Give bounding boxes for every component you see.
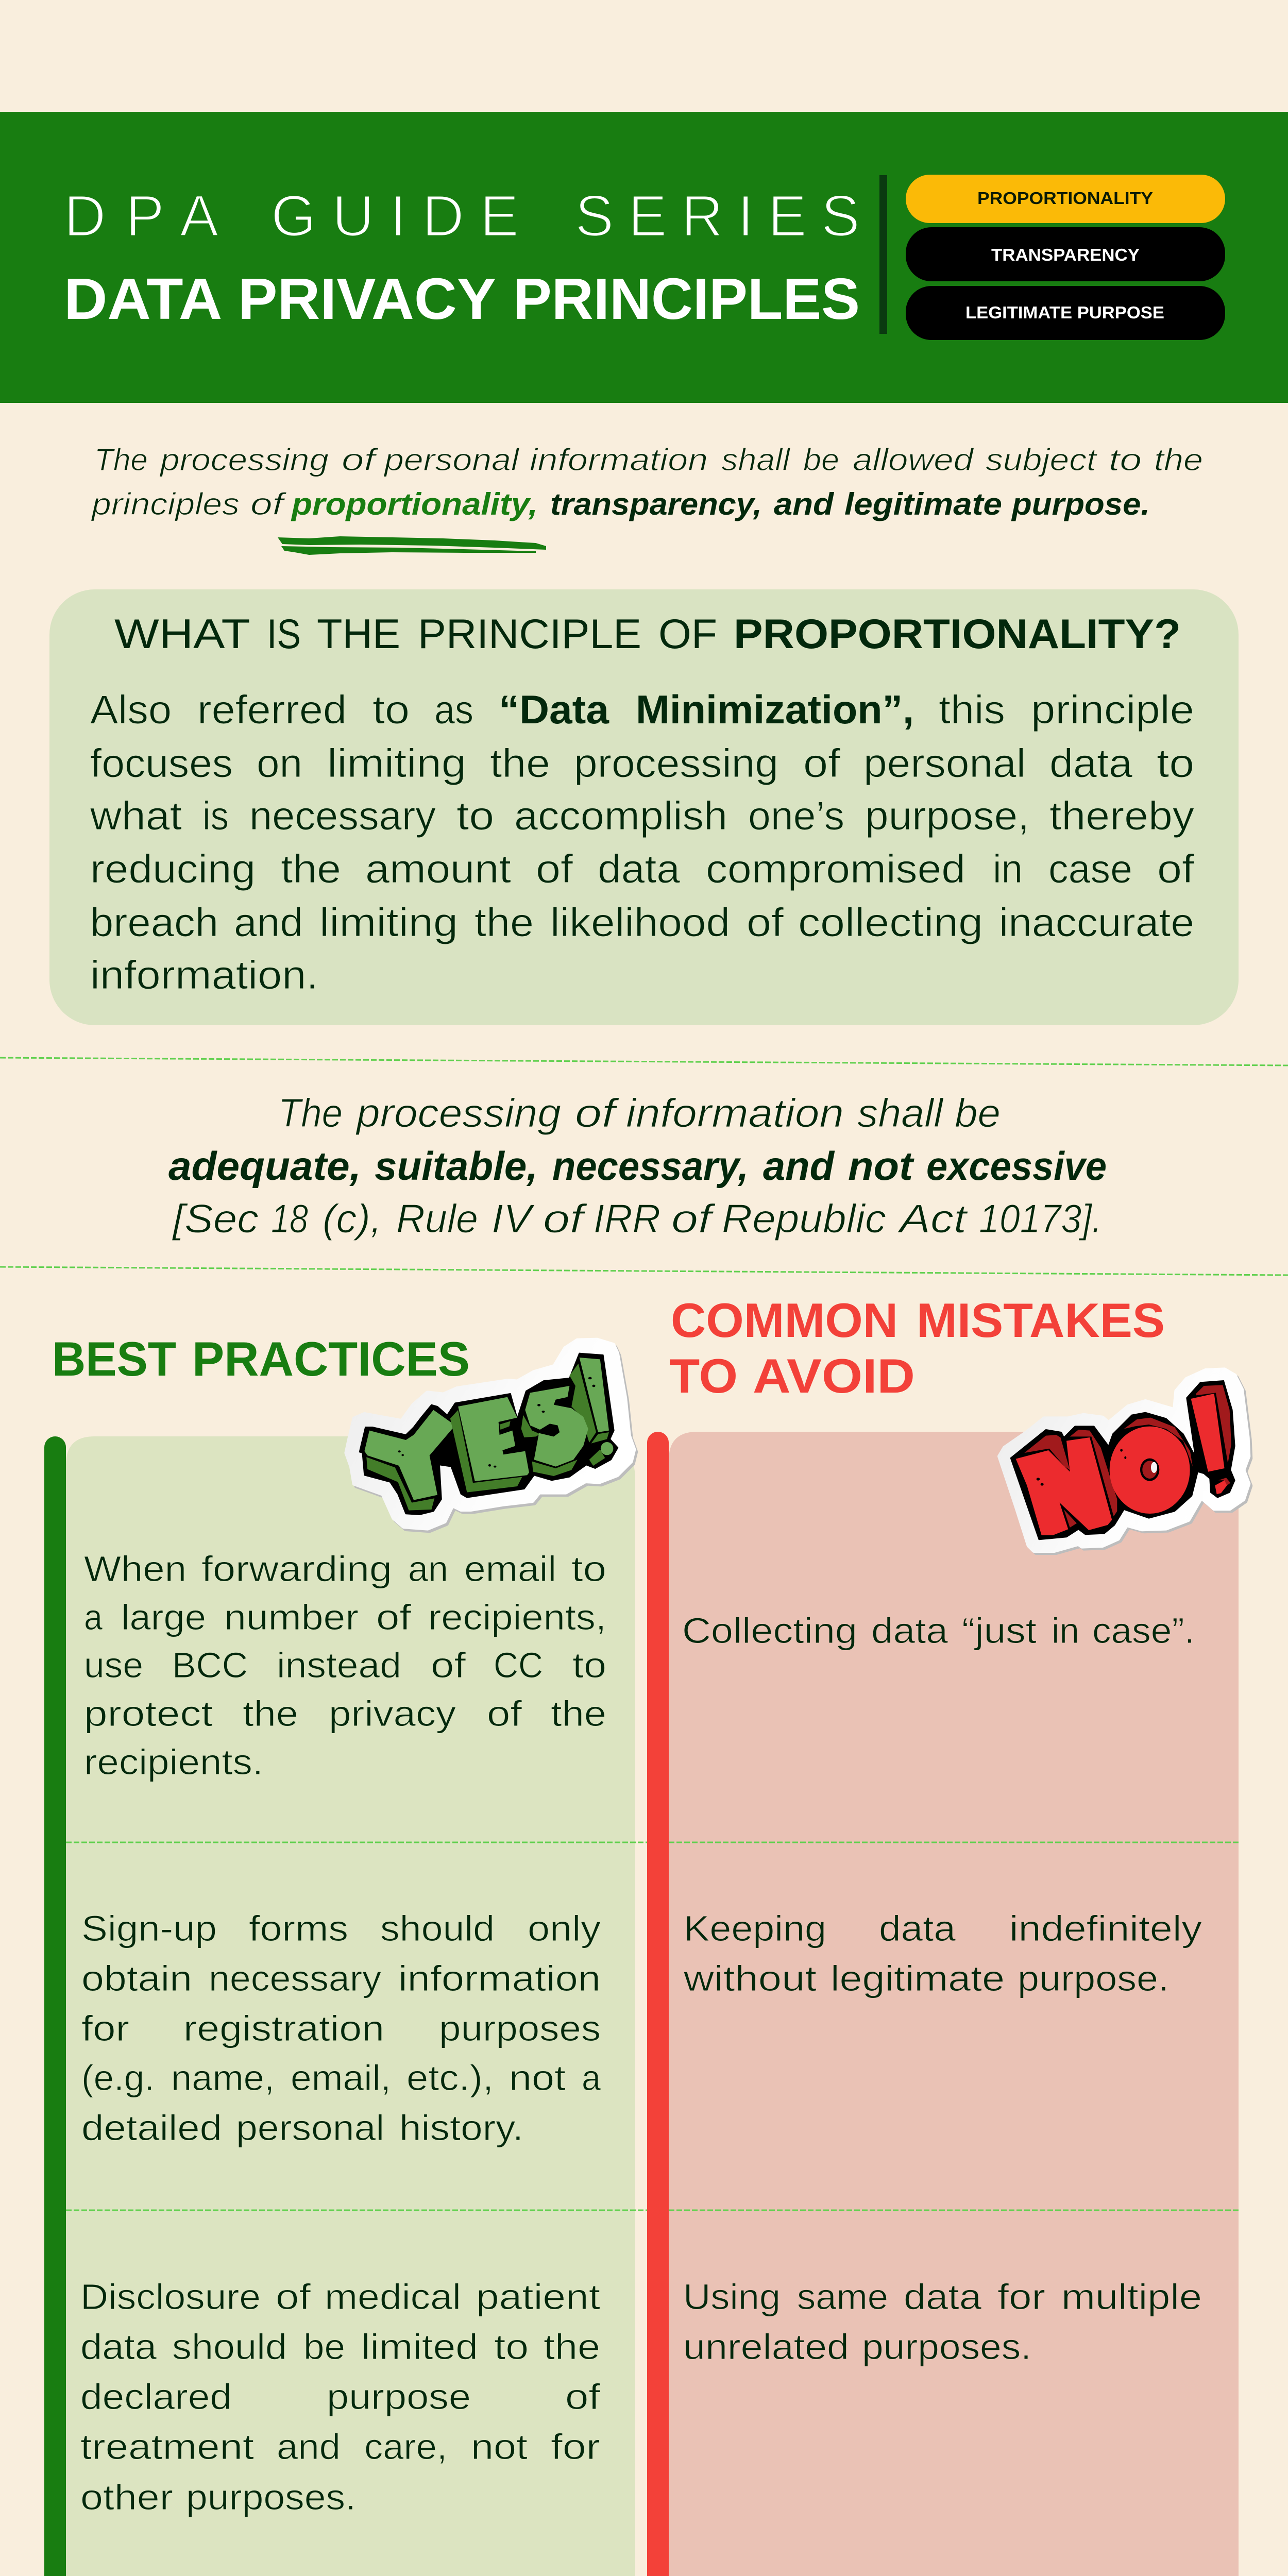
common mistake 2 (683, 1908, 1202, 1998)
panel body text: of (803, 740, 840, 786)
panel body text: in (993, 846, 1023, 891)
panel heading: PROPORTIONALITY? (734, 611, 1181, 657)
best practice 1: protect (84, 1693, 213, 1734)
brush underline (278, 536, 546, 555)
icon: NO sticker (999, 1369, 1250, 1553)
panel body text: on (257, 740, 302, 786)
legal statement: [Sec (172, 1196, 259, 1241)
legal statement: be (955, 1090, 1001, 1136)
legal statement: necessary, (552, 1143, 749, 1189)
legal statement: information (626, 1090, 844, 1136)
intro statement: information (530, 443, 708, 477)
pill: transparency: TRANSPARENCY (991, 245, 1140, 264)
best practice 2: a (582, 2058, 601, 2098)
best practice 3: of (565, 2377, 601, 2417)
panel: best practices column (44, 1436, 635, 2576)
best practice 3: data (80, 2327, 157, 2367)
panel body text: referred (197, 687, 347, 732)
best practice 3: of (276, 2277, 311, 2317)
panel: what is the principle of proportionality (49, 589, 1239, 1025)
legal statement: The (278, 1090, 343, 1136)
best practice 1: privacy (329, 1693, 456, 1734)
panel body text: the (281, 846, 341, 891)
intro statement: legitimate (844, 487, 1002, 521)
title: Data Privacy Principles: PRIVACY (238, 266, 496, 331)
best practice 1: instead (277, 1645, 401, 1685)
common mistake 1: data (871, 1611, 948, 1651)
intro statement: The (94, 443, 148, 477)
common mistake 2: Keeping (684, 1908, 826, 1948)
panel heading: THE (317, 611, 400, 657)
common mistake 3: multiple (1061, 2277, 1202, 2317)
panel body text: focuses (90, 740, 233, 786)
best practice 2: only (528, 1908, 601, 1948)
panel body text: amount (365, 846, 511, 891)
best practice 3: other (80, 2477, 173, 2517)
panel body text: one’s (748, 793, 844, 838)
intro statement: and (774, 487, 834, 521)
best practice 2 (81, 1908, 601, 2148)
panel body text: purpose, (865, 793, 1029, 838)
legal statement: excessive (926, 1143, 1107, 1189)
legal statement: of (543, 1196, 588, 1241)
panel body text: what (90, 793, 182, 838)
best practice 2: email, (291, 2058, 391, 2098)
legal statement: shall (857, 1090, 944, 1136)
panel body text: the (490, 740, 550, 786)
best practice 1: to (571, 1549, 606, 1589)
best practice 2: registration (183, 2008, 384, 2048)
panel body text: principle (1031, 687, 1194, 732)
panel body text (90, 687, 1194, 997)
common mistake 2: data (879, 1908, 956, 1948)
panel body text: information. (90, 952, 318, 997)
legal statement: IV (492, 1196, 535, 1241)
best practice 1: recipients, (428, 1597, 606, 1637)
panel body text: personal (863, 740, 1026, 786)
legal statement: Rule (396, 1196, 478, 1241)
best practice 2: history. (399, 2108, 523, 2148)
common mistake 3: data (904, 2277, 981, 2317)
best practice 3: the (544, 2327, 600, 2367)
panel body text: limiting (327, 740, 466, 786)
panel body text: to (456, 793, 494, 838)
best practice 2: detailed (81, 2108, 222, 2148)
header banner (0, 112, 1288, 403)
panel body text: to (1157, 740, 1194, 786)
best practice 2: purposes (439, 2008, 601, 2048)
heading: best practices: PRACTICES (192, 1332, 470, 1386)
best practice 2: forms (249, 1908, 348, 1948)
best practice 2: for (81, 2008, 129, 2048)
best practice 3: for (551, 2427, 600, 2467)
best practice 3: not (471, 2427, 528, 2467)
panel body text: “Data (499, 687, 609, 732)
panel heading: PRINCIPLE (418, 611, 641, 657)
best practice 1: of (431, 1645, 466, 1685)
header divider (879, 175, 887, 334)
best practice 3: should (172, 2327, 287, 2367)
legal statement: (c), (323, 1196, 382, 1241)
heading: common mistakes to avoid (669, 1293, 1165, 1403)
legal statement: not (848, 1143, 914, 1189)
best practice 1: When (84, 1549, 187, 1589)
intro statement: purpose. (1011, 487, 1150, 521)
title: Data Privacy Principles: PRINCIPLES (513, 266, 860, 331)
legal statement: suitable, (375, 1143, 538, 1189)
best practice 3: purpose (327, 2377, 471, 2417)
best practice 1: CC (494, 1645, 543, 1685)
common mistake 1: “just (962, 1611, 1037, 1651)
best practice 3: and (277, 2427, 341, 2467)
panel body text: limiting (319, 900, 458, 945)
best practice 3: treatment (80, 2427, 254, 2467)
heading: common mistakes to avoid: MISTAKES (917, 1293, 1165, 1347)
title: DPA Guide Series: SERIES (575, 183, 860, 248)
intro statement: of (342, 443, 379, 477)
panel body text: breach (90, 900, 218, 945)
legal statement: adequate, (168, 1143, 361, 1189)
pill: transparency (906, 227, 1225, 281)
best practice 1: large (121, 1597, 206, 1637)
intro statement: shall (721, 443, 791, 477)
panel body text: inaccurate (999, 900, 1194, 945)
legal statement (168, 1090, 1107, 1241)
pill: legitimate purpose (906, 286, 1225, 340)
panel body text: thereby (1049, 793, 1194, 838)
panel body text: reducing (90, 846, 256, 891)
best practice 2: Sign-up (81, 1908, 217, 1948)
panel body text: of (747, 900, 784, 945)
legal statement: Republic (722, 1196, 886, 1241)
panel body text: likelihood (550, 900, 730, 945)
intro statement: personal (383, 443, 520, 477)
common mistake 1: case”. (1092, 1611, 1195, 1651)
legal statement: processing (355, 1090, 561, 1136)
panel body text: compromised (706, 846, 965, 891)
panel body text: collecting (798, 900, 983, 945)
panel heading: IS (267, 611, 301, 657)
intro statement: processing (159, 443, 329, 477)
heading: common mistakes to avoid: COMMON (671, 1293, 898, 1347)
icon: YES sticker (347, 1340, 636, 1531)
intro statement: subject (986, 443, 1098, 477)
best practice 3: Disclosure (80, 2277, 261, 2317)
best practice 1: a (84, 1597, 103, 1637)
panel body text: of (1157, 846, 1194, 891)
best practice 1: the (551, 1693, 606, 1734)
panel body text: processing (574, 740, 778, 786)
common mistake 1: in (1052, 1611, 1079, 1651)
best practice 3: to (494, 2327, 529, 2367)
legal statement: and (763, 1143, 835, 1189)
best practice 1: of (376, 1597, 412, 1637)
common mistake 2: without (683, 1958, 817, 1998)
title: Data Privacy Principles: DATA (64, 266, 221, 331)
heading: common mistakes to avoid: AVOID (753, 1349, 915, 1403)
panel body text: necessary (249, 793, 436, 838)
panel body text: Also (90, 687, 172, 732)
panel body text: Minimization”, (636, 687, 914, 732)
best practice 3: purposes. (186, 2477, 356, 2517)
best practice 1: of (487, 1693, 522, 1734)
pill: proportionality (906, 175, 1225, 223)
intro statement: allowed (853, 443, 974, 477)
best practice 1: BCC (172, 1645, 248, 1685)
legal statement: of (671, 1196, 716, 1241)
panel heading: OF (658, 611, 717, 657)
best practice 2: necessary (209, 1958, 381, 1998)
best practice 1: to (572, 1645, 606, 1685)
legal statement: IRR (594, 1196, 660, 1241)
best practice 3: be (303, 2327, 345, 2367)
common mistake 2: indefinitely (1009, 1908, 1202, 1948)
intro statement: be (803, 443, 839, 477)
best practice 1: the (243, 1693, 298, 1734)
legal statement: 10173]. (979, 1196, 1102, 1241)
common mistake 3 (683, 2277, 1202, 2367)
legal statement: 18 (271, 1196, 308, 1241)
title: DPA Guide Series: GUIDE (271, 183, 519, 248)
best practice 1: email (464, 1549, 556, 1589)
best practice 3: medical (325, 2277, 461, 2317)
common mistake 3: Using (683, 2277, 781, 2317)
common mistake 2: purpose. (1018, 1958, 1169, 1998)
pill: proportionality: PROPORTIONALITY (977, 189, 1153, 208)
panel body text: the (474, 900, 534, 945)
best practice 1: an (408, 1549, 448, 1589)
best practice 2: should (380, 1908, 495, 1948)
best practice 1: recipients. (84, 1742, 263, 1782)
common mistake 1: Collecting (682, 1611, 857, 1651)
intro statement: proportionality, (291, 487, 538, 521)
panel body text: accomplish (514, 793, 727, 838)
best practice 3: care, (364, 2427, 447, 2467)
intro statement: the (1154, 443, 1203, 477)
pill: legitimate purpose: LEGITIMATE PURPOSE (965, 303, 1164, 322)
panel body text: to (372, 687, 410, 732)
best practice 2: etc.), (406, 2058, 494, 2098)
title: DPA Guide Series: DPA (64, 183, 219, 248)
panel body text: case (1048, 846, 1132, 891)
best practice 2: name, (171, 2058, 275, 2098)
legal statement: Act (897, 1196, 969, 1241)
common mistake 3: for (997, 2277, 1045, 2317)
intro statement: transparency, (550, 487, 762, 521)
panel heading: WHAT (114, 611, 249, 657)
intro statement: of (250, 487, 287, 521)
panel body text: of (536, 846, 573, 891)
best practice 1 (84, 1549, 606, 1782)
intro statement: to (1109, 443, 1142, 477)
panel body text: is (202, 793, 229, 838)
panel body text: data (598, 846, 681, 891)
best practice 3 (80, 2277, 601, 2517)
best practice 1: forwarding (201, 1549, 392, 1589)
legal statement: of (575, 1090, 620, 1136)
best practice 3: limited (361, 2327, 478, 2367)
heading: best practices: BEST (52, 1332, 176, 1386)
common mistake 2: legitimate (831, 1958, 1005, 1998)
best practice 2: (e.g. (81, 2058, 155, 2098)
best practice 2: obtain (81, 1958, 192, 1998)
best practice 3: patient (476, 2277, 600, 2317)
panel: common mistakes column (647, 1432, 1239, 2576)
common mistake 3: purposes. (862, 2327, 1031, 2367)
common mistake 3: same (797, 2277, 888, 2317)
panel body text: as (434, 687, 473, 732)
intro statement: principles (91, 487, 240, 521)
panel body text: data (1049, 740, 1133, 786)
best practice 2: not (509, 2058, 566, 2098)
best practice 3: declared (80, 2377, 232, 2417)
heading: common mistakes to avoid: TO (669, 1349, 738, 1403)
best practice 1: use (84, 1645, 143, 1685)
panel body text: and (234, 900, 303, 945)
intro statement (91, 443, 1203, 521)
best practice 2: information (398, 1958, 601, 1998)
best practice 1: number (224, 1597, 359, 1637)
panel body text: this (939, 687, 1005, 732)
best practice 2: personal (236, 2108, 384, 2148)
common mistake 3: unrelated (683, 2327, 849, 2367)
